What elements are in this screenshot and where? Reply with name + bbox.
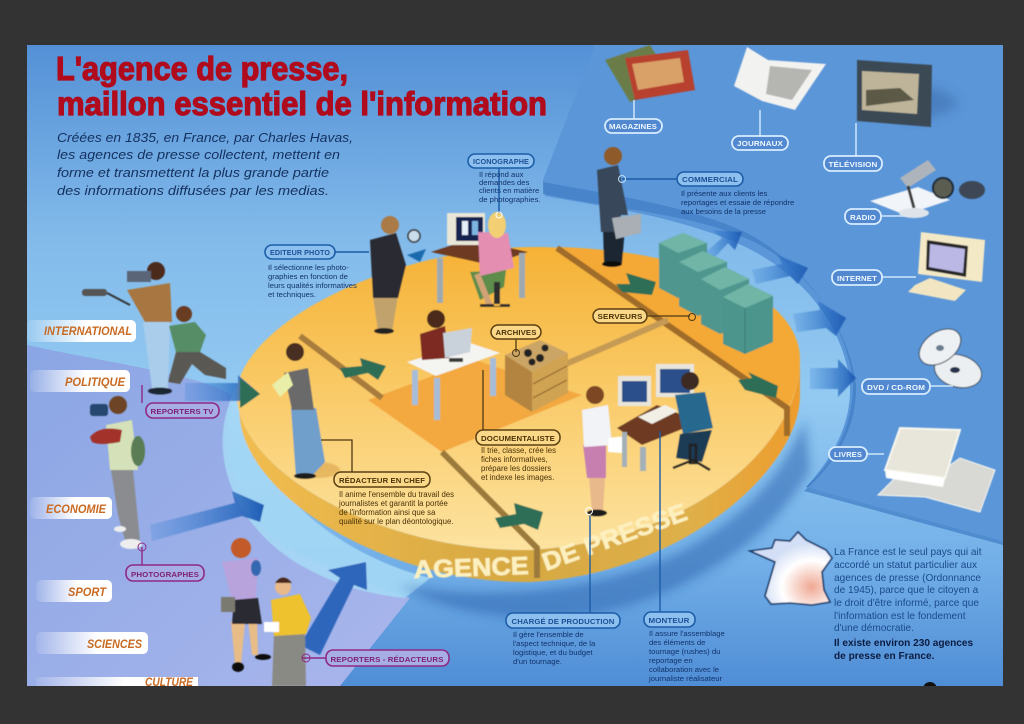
text: charge de production: l'aspect technique, de la <box>513 639 596 648</box>
text: France note: accordé un statut particulier aux <box>834 560 977 571</box>
text: France note: de presse en France. <box>834 651 935 662</box>
text: iconographe: clients en matière <box>479 186 539 195</box>
disc side <box>237 360 800 582</box>
person: photo editor <box>370 216 426 334</box>
title <box>56 50 547 122</box>
disc halo <box>223 385 430 598</box>
arrow: photographes <box>150 491 264 541</box>
label: archives <box>491 325 541 339</box>
label: redacteur en chef <box>334 472 430 487</box>
intro text <box>57 130 353 198</box>
icon: CD-ROM <box>913 322 985 393</box>
text: commercial <box>681 189 794 216</box>
chip: politique <box>30 370 130 392</box>
text: editeur photo: Il sélectionne les photo- <box>268 263 349 272</box>
servers <box>659 233 773 354</box>
label: radio: RADIO <box>850 213 876 222</box>
panel: sources plane <box>27 345 410 686</box>
label: photographes <box>126 565 204 581</box>
text: France note: agences de presse (Ordonnance <box>834 573 981 584</box>
label: magazines <box>605 119 662 133</box>
label: commercial: COMMERCIAL <box>682 175 738 184</box>
chip: culture <box>36 677 198 689</box>
disc label: AGENCE <box>413 552 529 584</box>
server 3 <box>701 267 749 334</box>
text: France note: le droit d'être informé, parce que <box>834 598 979 609</box>
text: editeur photo: leurs qualités informatives <box>268 281 357 290</box>
disc label: DE PRESSE <box>538 498 691 577</box>
chip: economie <box>30 497 112 519</box>
text: editeur photo: et techniques. <box>268 290 316 299</box>
connector lines <box>138 100 953 662</box>
label: monteur <box>644 612 695 627</box>
text: commercial: aux besoins de la presse <box>681 207 766 216</box>
editor desk <box>617 364 713 471</box>
label: redacteur en chef: RÉDACTEUR EN CHEF <box>339 476 425 485</box>
icon: computer <box>908 232 985 301</box>
label: serveurs <box>593 309 647 323</box>
person: photographer <box>90 396 145 549</box>
intro text: les agences de presse collectent, mettent en <box>57 147 340 162</box>
panel: media plane edge <box>543 182 1003 545</box>
iconographer desk <box>431 212 528 307</box>
text: France note <box>834 547 982 662</box>
text: documentaliste: fiches informatives, <box>481 455 548 464</box>
icon: map of France <box>750 532 832 605</box>
text: monteur <box>648 629 725 683</box>
label: editeur photo: EDITEUR PHOTO <box>270 248 330 257</box>
green arrow right <box>738 372 778 398</box>
person: iconographer <box>470 212 514 307</box>
label: archives: ARCHIVES <box>496 328 536 337</box>
text: redacteur en chef: de l'information ainsi que sa <box>339 508 436 517</box>
person: man in yellow <box>264 578 311 686</box>
arrows into the disc <box>150 375 367 655</box>
title: maillon essentiel de l'information <box>57 85 547 122</box>
label: commercial <box>677 172 743 186</box>
label: iconographe: ICONOGRAPHE <box>473 157 529 166</box>
text: monteur: tournage (rushes) du <box>649 647 720 656</box>
icon: magazines <box>605 45 695 102</box>
chip: culture: CULTURE <box>145 677 193 689</box>
arrow: media 1 <box>706 230 742 260</box>
icon: books <box>878 428 995 512</box>
arrows from disc to media <box>706 230 856 397</box>
green arrows on the disc <box>340 273 778 530</box>
text: iconographe <box>479 170 541 204</box>
text: commercial: Il présente aux clients les <box>681 189 767 198</box>
label: charge de production <box>506 613 620 628</box>
arrow: media 4 <box>810 359 856 397</box>
text: commercial: reportages et essaie de répondre <box>681 198 794 207</box>
text: iconographe: Il répond aux <box>479 170 524 179</box>
text: France note: d'une démocratie. <box>834 623 914 634</box>
arrow: reporters redacteurs <box>300 562 367 655</box>
label: reporters tv <box>146 403 219 418</box>
bottom frame <box>0 686 1024 724</box>
label: television <box>824 156 882 171</box>
chip: sport: SPORT <box>68 587 107 599</box>
text: redacteur en chef: journalistes et garantit la portée <box>338 499 448 508</box>
label: journaux: JOURNAUX <box>737 139 783 148</box>
label: editeur photo <box>265 245 335 259</box>
chip: international: INTERNATIONAL <box>44 326 132 338</box>
panel: media plane <box>543 45 1003 541</box>
text: monteur: Il assure l'assemblage <box>649 629 725 638</box>
text: iconographe: de photographies. <box>479 195 541 204</box>
disc label <box>413 498 691 584</box>
text: editeur photo: graphies en fonction de <box>268 272 348 281</box>
topic chips <box>27 320 198 689</box>
text: documentaliste: prépare les dossiers <box>481 464 551 473</box>
chip: sciences <box>36 632 148 654</box>
label: livres <box>829 447 867 461</box>
disc shadow <box>400 420 810 619</box>
text: documentaliste: et indexe les images. <box>481 473 554 482</box>
intro text: forme et transmettent la plus grande partie <box>57 165 329 180</box>
arrow: reporters TV <box>185 375 260 408</box>
label: charge de production: CHARGÉ DE PRODUCTION <box>512 617 614 626</box>
arrow head: reporters TV <box>240 378 260 408</box>
text: redacteur en chef: Il anime l'ensemble du travail des <box>339 490 454 499</box>
centre platform <box>368 360 582 452</box>
label: reporters redacteurs <box>326 650 449 666</box>
text: monteur: collaboration avec le <box>649 665 719 674</box>
agency disc <box>223 247 810 619</box>
label: journaux <box>732 136 788 150</box>
intro text: Créées en 1835, en France, par Charles Havas, <box>57 130 353 145</box>
label: photographes: PHOTOGRAPHES <box>131 570 199 579</box>
documentalist desk <box>407 310 500 420</box>
label: serveurs: SERVEURS <box>598 312 642 321</box>
icon: logo dot <box>923 682 937 696</box>
person: kneeling reporter <box>168 306 226 384</box>
arrow: media 2 <box>752 255 808 284</box>
text: monteur: journaliste réalisateur <box>648 674 723 683</box>
chip: politique: POLITIQUE <box>65 377 125 389</box>
green arrow top <box>616 273 656 295</box>
text: France note: l'information est le fondement <box>834 611 966 622</box>
person: documentalist <box>420 310 449 360</box>
server 1 <box>659 233 707 298</box>
label: reporters redacteurs: REPORTERS - RÉDACTEURS <box>330 655 444 664</box>
icon: television <box>857 60 958 127</box>
text: documentaliste: Il trie, classe, crée les <box>481 446 556 455</box>
label: documentaliste <box>476 430 560 445</box>
label: reporters tv: REPORTERS TV <box>150 407 214 416</box>
label: television: TÉLÉVISION <box>828 160 878 169</box>
label: internet: INTERNET <box>837 274 877 283</box>
text: iconographe: demandes des <box>479 178 530 187</box>
arrow: media 3 <box>793 301 846 336</box>
label: dvd cd-rom <box>862 379 930 394</box>
person: woman reporter <box>221 538 271 672</box>
text: charge de production: Il gère l'ensemble de <box>513 630 584 639</box>
label: dvd cd-rom: DVD / CD-ROM <box>867 383 925 392</box>
text: charge de production <box>513 630 596 666</box>
text: documentaliste <box>481 446 556 482</box>
text: redacteur en chef <box>338 490 454 526</box>
chip: sport <box>36 580 112 602</box>
server 2 <box>679 251 727 316</box>
text: France note: La France est le seul pays qui ait <box>834 547 982 558</box>
intro text: des informations diffusées par les medias. <box>57 183 329 198</box>
person: cameraman <box>82 262 172 394</box>
icon: newspaper <box>734 47 826 110</box>
text: monteur: des éléments de <box>649 638 705 647</box>
label: internet <box>832 270 882 285</box>
top right sector <box>557 247 800 408</box>
chip: economie: ECONOMIE <box>46 504 106 516</box>
label: radio <box>845 209 881 224</box>
label: documentaliste: DOCUMENTALISTE <box>481 434 555 443</box>
text: redacteur en chef: qualité sur le plan déontologique. <box>339 517 453 526</box>
label: livres: LIVRES <box>834 450 862 459</box>
label: monteur: MONTEUR <box>648 616 690 625</box>
person: production manager <box>582 386 627 516</box>
person: commercial <box>597 147 641 267</box>
title: L'agence de presse, <box>56 50 348 87</box>
divider walls <box>300 248 787 578</box>
server 4 <box>723 284 773 354</box>
chip: international <box>27 320 136 342</box>
icon: radio microphone <box>870 160 985 218</box>
text: monteur: reportage en <box>649 656 693 665</box>
person: monteur <box>673 372 713 470</box>
text: editeur photo <box>268 263 357 299</box>
label: iconographe <box>468 154 534 168</box>
text: charge de production: d'un tournage. <box>513 657 562 666</box>
label: magazines: MAGAZINES <box>609 122 657 131</box>
text: France note: Il existe environ 230 agences <box>834 638 974 649</box>
person: editor in chief <box>272 343 340 479</box>
chip: sciences: SCIENCES <box>87 639 142 651</box>
green arrow left <box>340 358 386 380</box>
disc top <box>237 247 800 550</box>
text: France note: de 1945), parce que le citoyen a <box>834 585 979 596</box>
archives cabinet <box>505 340 568 412</box>
text: charge de production: logistique, et du budget <box>513 648 593 657</box>
green arrow bottom <box>495 503 543 530</box>
